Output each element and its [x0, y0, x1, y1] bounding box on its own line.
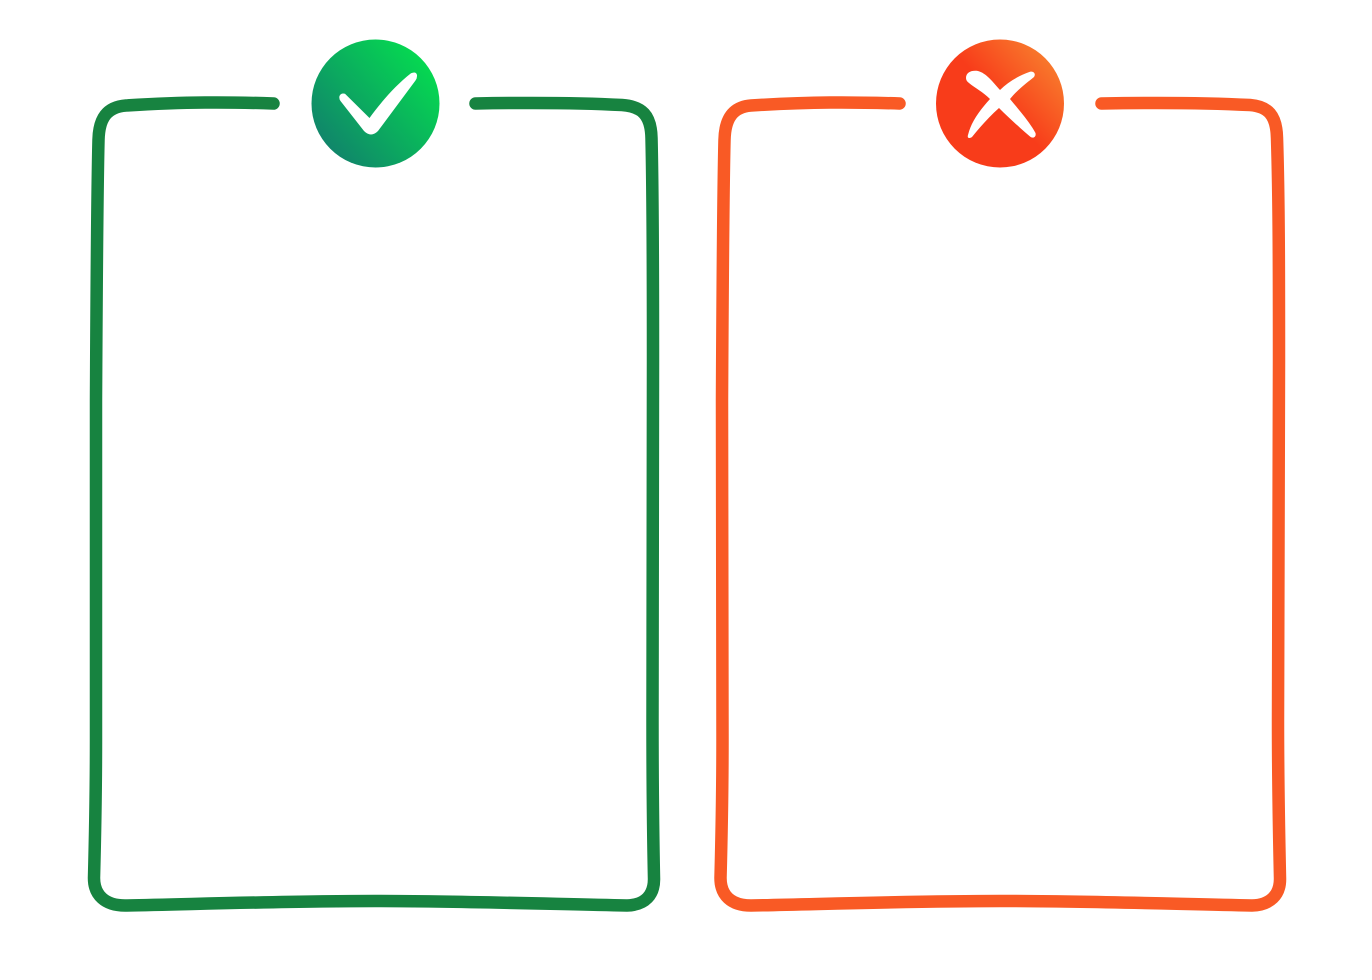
panel: negative frame: [720, 40, 1280, 906]
panel: positive frame: [94, 40, 654, 906]
icon: cross mark badge: [936, 40, 1064, 168]
green outline: [94, 102, 654, 906]
icon: check mark badge: [312, 40, 440, 168]
orange outline: [720, 102, 1280, 906]
